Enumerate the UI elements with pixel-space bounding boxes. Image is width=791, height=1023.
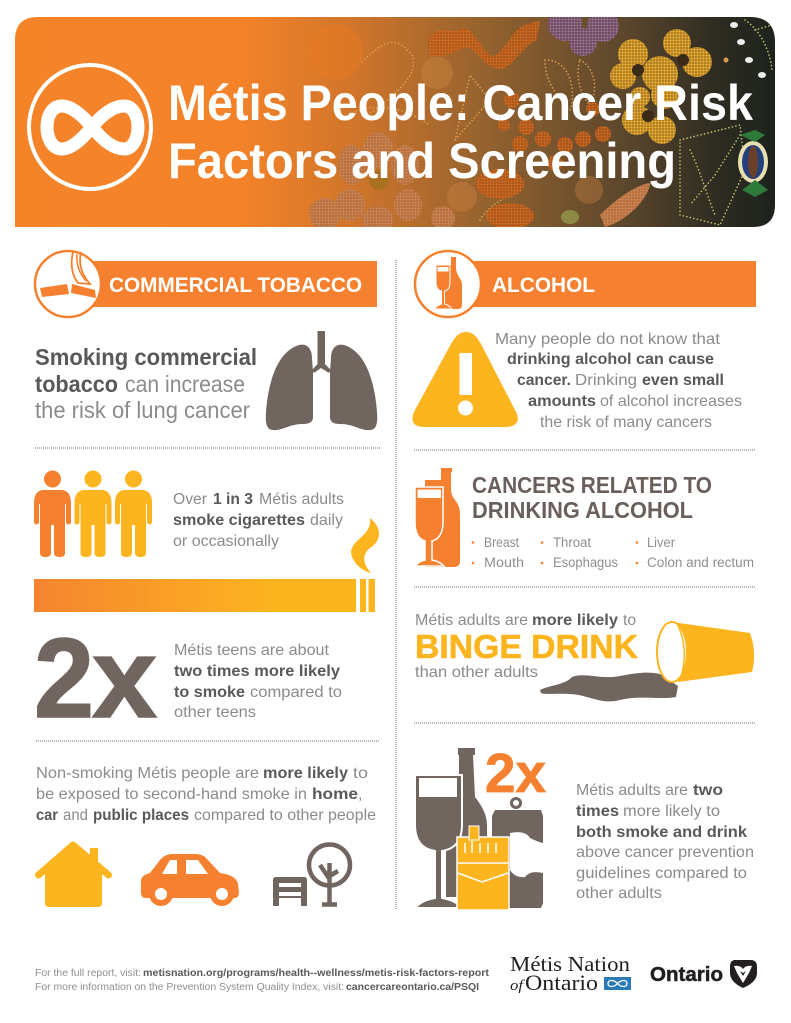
text: second-hand smoke: car bbox=[36, 807, 58, 824]
text: alcohol warning: amounts bbox=[528, 393, 596, 410]
footer references: For the full report, visit: bbox=[35, 967, 141, 979]
title: Factors and Screening bbox=[168, 133, 676, 189]
text: smoking and lung cancer bbox=[35, 344, 257, 423]
text: smoke and drink: more likely to bbox=[623, 803, 720, 820]
icon: car bbox=[141, 854, 239, 906]
person orange bbox=[34, 470, 71, 557]
text: binge drink: more likely bbox=[532, 612, 618, 629]
icon: three people bbox=[34, 470, 152, 557]
icon: drinks and cigarette pack with 2x bbox=[415, 742, 546, 910]
text: binge drink: to bbox=[623, 612, 636, 629]
text: smoke and drink: guidelines compared to bbox=[576, 865, 747, 882]
header bar: alcohol: ALCOHOL bbox=[492, 274, 595, 297]
text: second-hand smoke: more likely bbox=[263, 765, 348, 782]
heading: cancers related to drinking alcohol bbox=[472, 472, 712, 523]
text: teens likelihood bbox=[174, 642, 342, 721]
text: smoke and drink bbox=[576, 782, 754, 902]
text: binge drink: than other adults bbox=[415, 664, 538, 681]
text: alcohol warning: of alcohol increases bbox=[600, 393, 742, 410]
text: alcohol warning bbox=[495, 331, 742, 431]
person yellow bbox=[74, 470, 112, 557]
text: second-hand smoke: Non-smoking Métis people are bbox=[36, 765, 259, 782]
text: teens likelihood: Métis teens are about bbox=[174, 642, 330, 659]
stat: 2x teens: 2 bbox=[34, 615, 94, 741]
text: alcohol warning: cancer. bbox=[517, 372, 571, 389]
logo: Ontario: Ontario bbox=[650, 964, 723, 986]
text: second-hand smoke: , bbox=[358, 786, 362, 803]
header bar: commercial tobacco bbox=[35, 251, 377, 317]
list: cancer types: Throat bbox=[553, 535, 591, 550]
icon: bench and tree bbox=[273, 844, 350, 906]
text: 1 in 3 adults: smoke cigarettes bbox=[173, 512, 305, 529]
footer references bbox=[35, 967, 490, 993]
panel: alcohol bbox=[412, 251, 756, 910]
cigarette pack bbox=[457, 826, 509, 910]
text: alcohol warning: the risk of many cancers bbox=[540, 414, 712, 431]
footer references: For more information on the Prevention System Quality Index, visit: bbox=[35, 981, 344, 993]
text: smoke and drink: both smoke and drink bbox=[576, 824, 747, 841]
icon: broken cigarette bbox=[40, 252, 96, 298]
infinity logo bbox=[29, 65, 151, 189]
text: second-hand smoke: home bbox=[312, 786, 358, 803]
text: alcohol warning: drinking alcohol can cause bbox=[507, 351, 714, 368]
text: second-hand smoke: public places bbox=[93, 807, 189, 824]
footer references: metisnation.org/programs/health--wellness/metis-risk-factors-report bbox=[143, 967, 490, 979]
text: 1 in 3 adults: or occasionally bbox=[173, 533, 279, 550]
heading: cancers related to drinking alcohol: DRINKING ALCOHOL bbox=[472, 497, 693, 523]
text: second-hand smoke: and bbox=[63, 807, 88, 824]
stat: 2x teens: x bbox=[92, 615, 157, 741]
bottle bbox=[446, 748, 487, 897]
text: smoking and lung cancer: Smoking commercial bbox=[35, 344, 257, 370]
text: teens likelihood: compared to bbox=[250, 684, 342, 701]
text: 1 in 3 adults: daily bbox=[310, 512, 343, 529]
text: smoking and lung cancer: the risk of lung cancer bbox=[35, 397, 250, 423]
text: 1 in 3 adults: Over bbox=[173, 491, 208, 508]
list: cancer types: Colon and rectum bbox=[647, 555, 754, 570]
person yellow bbox=[115, 470, 152, 557]
title: Métis People: Cancer Risk bbox=[168, 75, 753, 131]
column divider bbox=[395, 260, 397, 910]
panel: commercial tobacco bbox=[34, 251, 381, 907]
wine glass bbox=[415, 775, 462, 908]
heading: cancers related to drinking alcohol: CANCERS RELATED TO bbox=[472, 472, 712, 498]
icon: wine glass and bottle bbox=[415, 468, 460, 567]
banner bbox=[15, 7, 775, 234]
logo: Métis Nation of Ontario: Métis Nation bbox=[510, 952, 631, 976]
logo: Métis Nation of Ontario: of bbox=[510, 978, 525, 994]
header bar: alcohol bbox=[415, 251, 756, 317]
can bbox=[492, 798, 543, 908]
text: second-hand smoke: be exposed to second-hand smoke in bbox=[36, 786, 307, 803]
list: cancer types: Mouth bbox=[484, 555, 524, 570]
icon: glass and bottle small bbox=[434, 257, 462, 309]
text: binge drink bbox=[415, 612, 638, 681]
logo: Ontario bbox=[650, 960, 757, 988]
text: alcohol warning: Drinking bbox=[575, 372, 637, 389]
text: binge drink: BINGE DRINK bbox=[415, 628, 638, 665]
text: second-hand smoke bbox=[36, 765, 376, 824]
text: 1 in 3 adults: 1 in 3 bbox=[213, 491, 253, 508]
text: alcohol warning: Many people do not know that bbox=[495, 331, 721, 348]
list: cancer types: Breast bbox=[484, 535, 519, 550]
text: smoke and drink: other adults bbox=[576, 885, 662, 902]
title bbox=[168, 75, 753, 189]
text: second-hand smoke: to bbox=[353, 765, 368, 782]
icon: warning triangle bbox=[412, 332, 518, 427]
icon: lungs bbox=[266, 331, 377, 430]
text: smoke and drink: Métis adults are bbox=[576, 782, 688, 799]
icon: cigarette with smoke bbox=[34, 518, 379, 612]
text: second-hand smoke: compared to other people bbox=[194, 807, 376, 824]
text: teens likelihood: other teens bbox=[174, 704, 256, 721]
text: smoking and lung cancer: tobacco bbox=[35, 371, 118, 397]
stat: 2x teens bbox=[34, 615, 157, 741]
header bar: commercial tobacco: COMMERCIAL TOBACCO bbox=[109, 274, 362, 297]
text: alcohol warning: even small bbox=[642, 372, 724, 389]
text: smoking and lung cancer: can increase bbox=[125, 371, 245, 397]
text: 1 in 3 adults bbox=[173, 491, 344, 550]
icon: house bbox=[38, 844, 108, 907]
text: teens likelihood: to smoke bbox=[174, 684, 245, 701]
stat: 2x: 2x bbox=[485, 742, 546, 804]
icon: spilled cup and puddle bbox=[540, 622, 754, 701]
text: binge drink: Métis adults are bbox=[415, 612, 528, 629]
list: cancer types: Liver bbox=[647, 535, 675, 550]
text: smoke and drink: two bbox=[693, 782, 723, 799]
logo: Métis Nation of Ontario bbox=[510, 952, 631, 995]
banner beadwork floral artwork bbox=[307, 7, 772, 234]
text: 1 in 3 adults: Métis adults bbox=[259, 491, 344, 508]
text: smoke and drink: times bbox=[576, 803, 619, 820]
logo: Métis Nation of Ontario: Ontario bbox=[525, 970, 598, 995]
text: smoke and drink: above cancer prevention bbox=[576, 844, 754, 861]
text: teens likelihood: two times more likely bbox=[174, 663, 340, 680]
list: cancer types bbox=[472, 535, 754, 570]
footer references: cancercareontario.ca/PSQI bbox=[346, 981, 479, 993]
list: cancer types: Esophagus bbox=[553, 555, 618, 570]
